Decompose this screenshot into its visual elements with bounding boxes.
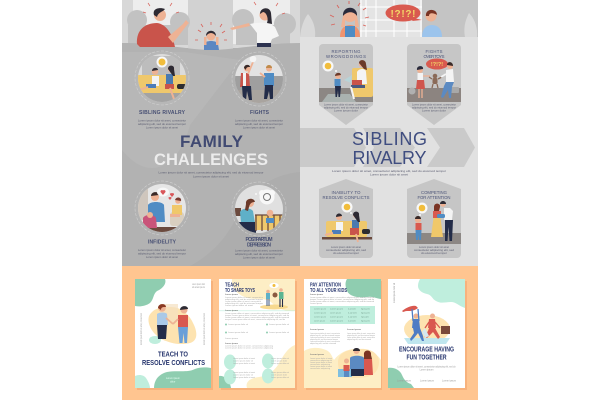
panel: competing for attention — [407, 179, 461, 258]
text: fights body: adipiscing elit, sed do eiusmod tempor — [235, 122, 283, 126]
text blocks: Lorem ipsum dolor sit amet, consectetur — [225, 296, 263, 299]
title: family challenges — [154, 132, 268, 169]
text blocks: consectetur adipiscing — [310, 363, 330, 366]
text blocks: Lorem ipsum — [310, 329, 324, 331]
text blocks: Lorem ipsum dolor sit amet, consectetur adipiscing elit, sed do eiusmod — [225, 316, 289, 319]
text blocks: adipiscing elit, sed do eiusmod tempor — [347, 334, 375, 337]
illustration: fights circle — [232, 52, 286, 106]
text blocks: Lorem ipsum — [310, 303, 322, 305]
mint blobs and lists: Lorem ipsum dolor sit — [233, 360, 253, 362]
text blocks: Lorem ipsum dolor sit amet, consectetur adipiscing elit, sed do eiusmod — [310, 300, 374, 303]
text: postpartum body: Lorem ipsum dolor sit amet, consectetur — [235, 248, 283, 252]
text blocks — [310, 294, 375, 370]
speech bubble — [386, 4, 422, 22]
text blocks: consectetur adipiscing — [310, 367, 330, 370]
text blocks: Lorem ipsum dolor sit amet, consectetur adipiscing elit, sed do eiusmod — [225, 312, 289, 315]
text: sibling rivalry body: adipiscing elit, sed do eiusmod tempor — [138, 122, 186, 126]
table: Lorem — [348, 316, 357, 319]
heading — [399, 344, 454, 362]
text: sibling rivalry body: Lorem ipsum dolor sit amet, consectetur — [138, 118, 186, 122]
text blocks: adipiscing elit, sed do eiusmod — [347, 338, 371, 341]
heading: REPORTING — [332, 49, 361, 54]
text: adipiscing elit, sed do eiusmod tempor — [412, 106, 456, 110]
text: intro — [332, 169, 446, 176]
text blocks: Lorem ipsum dolor sit amet — [310, 361, 332, 364]
text blocks: Lorem ipsum dolor sit — [269, 331, 289, 334]
top scene: upset children — [300, 0, 478, 37]
text blocks: Lorem ipsum dolor sit amet — [225, 304, 254, 307]
text: do eiusmod tempor — [333, 251, 359, 255]
table: Lorem ipsum — [330, 308, 343, 311]
heading: TO SHARE TOYS — [225, 288, 255, 294]
text: infidelity body — [138, 248, 186, 259]
text blocks: Lorem ipsum dolor sit amet — [310, 365, 332, 368]
heading: OVER TOYS — [424, 54, 445, 59]
heading — [322, 190, 370, 200]
text blocks: Lorem ipsum dolor sit amet, consectetur — [310, 332, 340, 335]
text blocks — [219, 294, 295, 350]
mint blobs and lists: Lorem ipsum dolor — [271, 374, 287, 376]
table: Lorem ipsum — [314, 308, 326, 311]
footer text: Lorem ipsum — [420, 368, 433, 372]
footer text — [393, 283, 456, 382]
heading: fights: FIGHTS — [250, 110, 270, 116]
footer text: Lorem ipsum dolor sit amet, consectetur adipiscing elit, sed do — [398, 366, 456, 368]
text blocks: Lorem ipsum dolor sit amet — [310, 357, 332, 360]
footer text: Lorem ipsum — [397, 380, 411, 382]
brochure: teach to share toys — [219, 279, 297, 390]
text blocks: consectetur adipiscing elit — [310, 359, 332, 362]
text blocks: Lorem ipsum dolor sit amet, consectetur adipiscing — [225, 344, 273, 348]
panel: sibling rivalry — [300, 0, 478, 266]
text blocks: tempor Lorem ipsum dolor sit amet, consectetur adipiscing elit, sed do — [225, 318, 286, 321]
text blocks: tempor Lorem ipsum dolor sit amet, consectetur adipiscing elit, sed do — [310, 298, 375, 301]
text blocks: Lorem ipsum dolor sit amet, consectetur adipiscing — [225, 346, 273, 350]
text: title intro — [158, 170, 264, 178]
text blocks: Lorem ipsum — [310, 294, 323, 296]
panel: brochures — [122, 266, 478, 400]
text: Lorem ipsum dolor sit amet, consectetur — [412, 102, 456, 106]
text: Lorem ipsum dolor sit amet — [331, 245, 361, 249]
heading — [326, 49, 366, 59]
heading: TO ALL YOUR KIDS — [310, 288, 348, 294]
mint blobs and lists: Lorem ipsum dolor sit amet — [233, 371, 255, 374]
mint blobs and lists: Lorem ipsum dolor sit — [271, 371, 289, 374]
text: fights body: Lorem ipsum dolor sit amet — [243, 125, 275, 129]
text blocks: Lorem ipsum dolor sit — [228, 323, 248, 326]
title: sibling rivalry — [352, 129, 427, 168]
title: family challenges: FAMILY — [180, 132, 244, 151]
footer text: Lorem ipsum — [442, 380, 456, 382]
side and corner text: Lorem ipsum dolor sit amet, consectetur — [203, 313, 206, 345]
text: Lorem ipsum dolor — [422, 108, 446, 112]
footer text: Lorem ipsum dolor sit — [393, 283, 396, 303]
text blocks: Lorem ipsum dolor sit amet, consectetur — [347, 336, 375, 339]
text blocks: Lorem ipsum — [225, 338, 238, 340]
table: Ipsum — [361, 313, 370, 315]
text blocks: Lorem ipsum dolor sit amet, consectetur — [310, 340, 340, 343]
panel: inability to resolve conflicts — [319, 179, 373, 258]
text: sibling rivalry body: Lorem ipsum dolor sit amet — [146, 125, 178, 129]
heading: postpartum depression: POSTPARTUM — [246, 237, 272, 243]
table: Lorem ipsum — [330, 316, 343, 319]
illustration: sharing toy — [260, 282, 288, 310]
text: infidelity body: adipiscing elit, sed do eiusmod tempor — [138, 252, 186, 256]
text blocks: Lorem ipsum dolor sit amet, consectetur — [310, 336, 340, 339]
mint blobs and lists — [224, 354, 289, 384]
text: title intro: Lorem ipsum dolor sit amet, consectetur adipiscing elit, sed do eiusmod tempor — [158, 170, 264, 174]
text: fights body: Lorem ipsum dolor sit amet, consectetur — [235, 118, 283, 122]
text blocks: adipiscing elit, sed do eiusmod tempor — [225, 302, 263, 305]
arrow band — [300, 128, 475, 167]
title: sibling rivalry: RIVALRY — [352, 148, 426, 168]
mint blobs and lists: Lorem ipsum dolor — [271, 360, 287, 362]
text: Lorem ipsum dolor sit amet, consectetur — [324, 102, 368, 106]
text: intro: Lorem ipsum dolor sit amet, consectetur adipiscing elit, sed do eiusmod tempor — [332, 169, 446, 173]
text: consectetur adipiscing elit, sed — [414, 248, 454, 252]
text: consectetur adipiscing elit, sed — [326, 248, 366, 252]
illustration: !?!?! — [431, 62, 443, 68]
table: Lorem ipsum — [330, 320, 343, 323]
text — [324, 102, 368, 112]
text: do eiusmod tempor — [421, 251, 447, 255]
illustration — [407, 201, 461, 244]
text: intro: Lorem ipsum dolor sit amet — [370, 172, 408, 176]
illustration: family — [338, 348, 379, 378]
text blocks: Lorem ipsum — [225, 294, 238, 296]
mint blobs and lists: Lorem ipsum dolor sit amet — [233, 376, 255, 379]
table: Lorem ipsum — [314, 312, 326, 315]
side and corner text: Lorem ipsum dolor sit amet, consectetur — [140, 313, 143, 345]
table: Lorem ipsum — [330, 312, 341, 315]
text blocks: Lorem ipsum — [225, 343, 238, 345]
illustration — [319, 60, 373, 102]
text blocks: adipiscing elit, sed do eiusmod tempor — [225, 298, 263, 301]
text blocks: Lorem ipsum dolor sit — [269, 323, 289, 326]
mint blobs and lists: Lorem ipsum dolor sit amet — [233, 357, 255, 360]
text blocks: Lorem ipsum — [347, 329, 361, 331]
heading: postpartum depression: DEPRESSION — [247, 242, 271, 248]
table: Lorem ipsum — [314, 316, 326, 319]
table: Ipsum — [361, 321, 370, 323]
illustration: pillow fight — [402, 306, 450, 344]
text: infidelity body: Lorem ipsum dolor sit amet, consectetur — [138, 248, 186, 252]
brochure: teach to resolve conflicts — [135, 279, 213, 390]
heading: FUN TOGETHER — [406, 352, 447, 362]
text blocks: Lorem ipsum dolor sit — [228, 331, 248, 334]
text blocks: Lorem ipsum — [225, 310, 238, 312]
illustration: sibling rivalry circle — [135, 51, 189, 105]
text blocks: Lorem ipsum dolor sit amet, consectetur — [225, 300, 261, 303]
heading: FOR ATTENTION — [418, 195, 450, 200]
text blocks: Lorem ipsum dolor sit amet, consectetur — [347, 332, 375, 335]
mint blobs and lists: Lorem ipsum dolor sit — [271, 357, 289, 360]
text: sibling rivalry body — [138, 118, 186, 129]
table: Ipsum — [361, 309, 370, 311]
mint blobs and lists: Lorem ipsum dolor sit amet — [233, 362, 255, 365]
mint blobs and lists: Lorem ipsum dolor sit — [271, 362, 289, 365]
text — [412, 102, 456, 112]
panel: fights over toys — [407, 44, 461, 125]
side and corner text — [140, 283, 206, 384]
text: title intro: Lorem ipsum dolor sit amet — [193, 174, 229, 178]
illustration: handshake — [148, 304, 196, 344]
side and corner text: sit amet ipsum — [192, 286, 205, 289]
heading: RESOLVE CONFLICTS — [142, 358, 205, 367]
heading: TEACH TO — [158, 349, 188, 358]
heading — [225, 282, 255, 294]
text: postpartum body: Lorem ipsum dolor sit amet — [243, 256, 275, 260]
table: Lorem — [348, 308, 356, 311]
heading: RESOLVE CONFLICTS — [322, 195, 370, 200]
table — [310, 306, 375, 324]
mint blobs and lists: Lorem ipsum dolor sit — [233, 374, 253, 376]
heading — [310, 282, 348, 294]
illustration: infidelity circle — [135, 181, 189, 235]
heading: PAY ATTENTION — [310, 282, 341, 288]
heading — [424, 49, 445, 59]
speech bubble: !?!?! — [390, 9, 416, 20]
table: Ipsum — [361, 317, 369, 319]
heading: sibling rivalry: SIBLING RIVALRY — [139, 110, 186, 116]
text: fights body — [235, 118, 283, 129]
side and corner text: Lorem ipsum — [166, 377, 180, 380]
brochure: encourage having fun together — [388, 279, 467, 390]
side and corner text: dolor — [170, 380, 176, 384]
panel: family challenges — [122, 0, 300, 266]
text: postpartum body: adipiscing elit, sed do eiusmod tempor — [235, 252, 283, 256]
heading: postpartum depression — [246, 237, 272, 248]
heading: FIGHTS — [426, 49, 443, 54]
brochure: pay attention to all your kids — [304, 279, 382, 390]
table: Lorem — [348, 312, 357, 315]
text: adipiscing elit, sed do eiusmod tempor — [324, 106, 368, 110]
mint blobs and lists: Lorem ipsum dolor sit — [271, 376, 289, 379]
heading — [418, 190, 450, 200]
heading: WRONGDOINGS — [326, 54, 366, 59]
text blocks: tempor Lorem ipsum dolor sit amet, consectetur adipiscing elit, sed do — [225, 314, 290, 317]
heading: COMPETING — [421, 190, 448, 195]
heading: ENCOURAGE HAVING — [399, 344, 454, 354]
text blocks: Lorem ipsum dolor sit amet, consectetur adipiscing elit, sed do eiusmod — [310, 296, 374, 299]
illustration — [322, 202, 372, 242]
text: infidelity body: Lorem ipsum dolor sit amet — [146, 255, 178, 259]
text: postpartum body — [235, 248, 283, 260]
text — [326, 245, 366, 255]
illustration: postpartum depression circle — [232, 182, 286, 236]
panel: reporting wrongdoings — [319, 44, 373, 125]
side and corner text: Lorem ipsum dolor — [192, 283, 205, 286]
text blocks: adipiscing elit, sed do eiusmod — [310, 342, 336, 345]
text blocks: adipiscing elit, sed do eiusmod tempor — [310, 334, 340, 337]
text — [414, 245, 454, 255]
heading: TEACH — [225, 282, 239, 288]
title: sibling rivalry: SIBLING — [352, 129, 427, 149]
top scene: arguing parents — [122, 0, 300, 52]
title: family challenges: CHALLENGES — [154, 151, 268, 169]
table: Lorem ipsum — [314, 320, 325, 323]
text blocks: Lorem ipsum — [310, 354, 324, 356]
text: Lorem ipsum dolor — [334, 108, 358, 112]
footer text: Lorem ipsum — [420, 380, 434, 382]
text blocks: adipiscing elit, sed do eiusmod tempor — [310, 338, 338, 341]
table: Lorem — [348, 320, 356, 323]
text: Lorem ipsum dolor sit amet — [419, 245, 449, 249]
heading: INABILITY TO — [332, 190, 361, 195]
heading — [142, 349, 205, 367]
heading: infidelity: INFIDELITY — [148, 240, 177, 246]
